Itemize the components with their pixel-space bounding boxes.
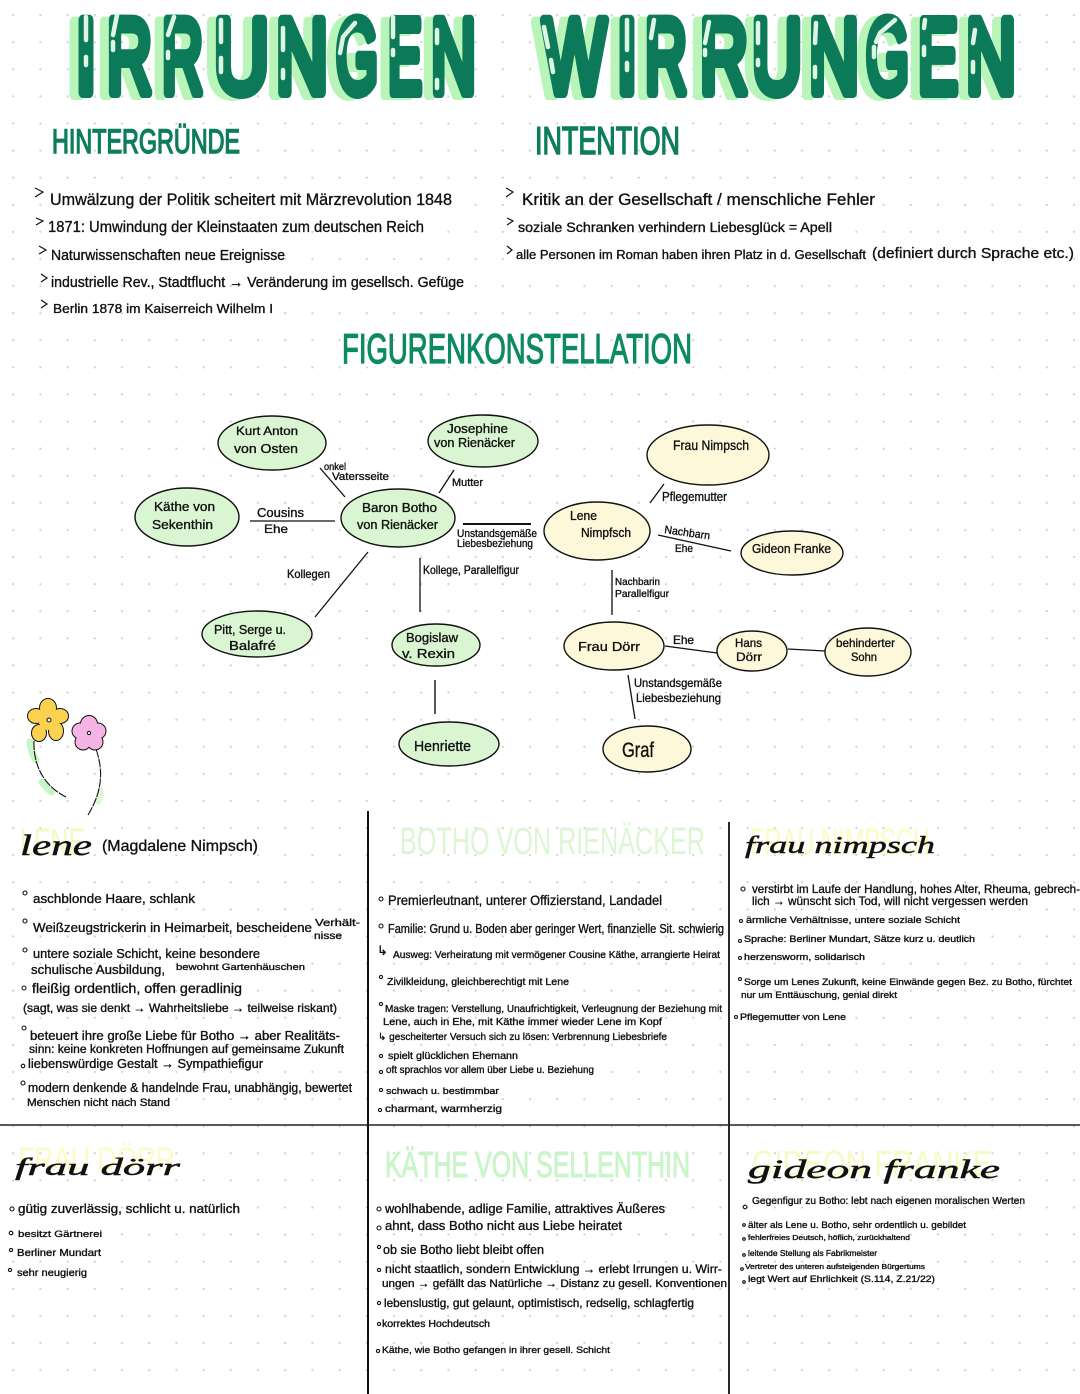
text block: Käthe traits: ob sie Botho liebt bleibt offen bbox=[383, 1243, 544, 1257]
relation labels: Ehe bbox=[673, 633, 694, 647]
title: IRRUNGEN: R bbox=[98, 0, 143, 118]
title: WIRRUNGEN: G bbox=[866, 0, 909, 116]
title: WIRRUNGEN: N bbox=[966, 0, 1016, 116]
text block: Käthe traits bbox=[376, 1201, 727, 1356]
title: WIRRUNGEN: I bbox=[608, 0, 628, 118]
node: Bogislaw v. Rexin: Bogislaw bbox=[406, 630, 459, 645]
node: Pitt, Serge, Balafré bbox=[202, 611, 312, 657]
text block: Frau Nimpsch traits: nur um Enttäuschung, genial direkt bbox=[741, 990, 897, 1001]
text block: Hintergründe: 1871: Umwindung der Kleinstaaten zum deutschen Reich bbox=[48, 219, 424, 236]
text block: Gideon traits: Gegenfigur zu Botho: lebt nach eigenen moralischen Werten bbox=[752, 1196, 1025, 1207]
node: Henriette: Henriette bbox=[414, 738, 471, 755]
relation labels: Unstandsgemäße bbox=[457, 528, 537, 540]
text block: Lene traits: untere soziale Schicht, keine besondere bbox=[33, 946, 260, 961]
text block: Botho traits: schwach u. bestimmbar bbox=[386, 1086, 499, 1097]
title: WIRRUNGEN: I bbox=[616, 0, 638, 116]
relation labels: Cousins bbox=[257, 505, 304, 520]
text block: Botho traits: Lene, auch in Ehe, mit Käthe immer wieder Lene im Kopf bbox=[383, 1017, 662, 1028]
heading: Intention: INTENTION bbox=[535, 120, 680, 163]
heading: Gideon Franke: gideon franke bbox=[748, 1155, 1000, 1184]
node: Baron Botho von Rienäcker: Baron Botho bbox=[362, 500, 437, 515]
text block: Lene traits: modern denkende & handelnde Frau, unabhängig, bewertet bbox=[28, 1080, 352, 1095]
heading: Figurenkonstellation: FIGURENKONSTELLATION bbox=[342, 325, 692, 372]
text block: Intention: (definiert durch Sprache etc.) bbox=[872, 245, 1074, 262]
node: Hans Dörr: Dörr bbox=[736, 650, 762, 664]
node: Lene Nimpsch: Nimpfsch bbox=[581, 525, 631, 540]
text block: Gideon traits: fehlerfreies Deutsch, höflich, zurückhaltend bbox=[748, 1233, 910, 1242]
text block: Hintergründe bbox=[35, 188, 464, 316]
text block: Botho traits: Ausweg: Verheiratung mit vermögener Cousine Käthe, arrangierte Heirat bbox=[393, 949, 720, 961]
node: Bogislaw v. Rexin: v. Rexin bbox=[402, 646, 455, 661]
relation labels: Liebesbeziehung bbox=[636, 691, 721, 705]
title: IRRUNGEN: U bbox=[214, 0, 269, 116]
relation labels: Pflegemutter bbox=[662, 489, 728, 504]
text block: Lene traits: Verhält- bbox=[315, 918, 360, 929]
node: Pitt, Serge, Balafré: Balafré bbox=[229, 638, 276, 653]
relation labels: Nachbarin bbox=[615, 577, 660, 588]
panel: Frau Nimpsch bbox=[734, 822, 1080, 1023]
panel: Lene bbox=[20, 822, 360, 1109]
relation labels: Parallelfigur bbox=[615, 589, 670, 600]
text block: Intention: alle Personen im Roman haben ihren Platz in d. Gesellschaft bbox=[516, 248, 867, 262]
title: IRRUNGEN: N bbox=[422, 0, 467, 118]
title: WIRRUNGEN: W bbox=[543, 0, 606, 116]
text block: Hintergründe: Umwälzung der Politik scheitert mit Märzrevolution 1848 bbox=[50, 190, 452, 209]
title: WIRRUNGEN: R bbox=[691, 0, 739, 118]
node: Bogislaw v. Rexin bbox=[392, 624, 480, 666]
text block: Käthe traits: ungen → gefällt das Natürliche → Distanz zu gesell. Konventionen bbox=[382, 1278, 727, 1290]
diagram: character constellation bbox=[135, 415, 911, 772]
text block: Käthe traits: Käthe, wie Botho gefangen in ihrer gesell. Schicht bbox=[382, 1345, 610, 1356]
panel: Frau Dörr bbox=[8, 1141, 240, 1279]
text block: Frau Dörr traits: besitzt Gärtnerei bbox=[18, 1229, 102, 1240]
panel: Gideon Franke bbox=[741, 1143, 1025, 1284]
node: Josephine von Rienäcker: Josephine bbox=[447, 421, 508, 436]
title: IRRUNGEN: E bbox=[379, 0, 413, 118]
text block: Hintergründe: industrielle Rev., Stadtflucht → Veränderung im gesellsch. Gefüge bbox=[51, 274, 464, 291]
node: Frau Dörr: Frau Dörr bbox=[578, 639, 641, 654]
relation labels: Nachbarn bbox=[664, 524, 711, 542]
text block: Botho traits: Zivilkleidung, gleichberechtigt mit Lene bbox=[387, 976, 569, 988]
node: Baron Botho von Rienäcker bbox=[341, 489, 455, 547]
text block: Lene traits: aschblonde Haare, schlank bbox=[33, 891, 196, 906]
text block: Botho traits: spielt glücklichen Ehemann bbox=[388, 1051, 518, 1062]
text block: Botho traits bbox=[377, 892, 724, 1115]
title: IRRUNGEN: U bbox=[205, 0, 260, 118]
title: IRRUNGEN: G bbox=[336, 0, 378, 116]
node: Gideon Franke bbox=[741, 531, 843, 575]
title: WIRRUNGEN: E bbox=[909, 0, 949, 118]
title: IRRUNGEN: N bbox=[276, 0, 328, 116]
text block: Botho traits: ↳ gescheiterter Versuch sich zu lösen: Verbrennung Liebesbriefe bbox=[378, 1032, 667, 1043]
node: Kurt Anton von Osten bbox=[218, 416, 326, 470]
node: behinderter Sohn: Sohn bbox=[851, 650, 877, 664]
relation labels: Vatersseite bbox=[332, 471, 389, 483]
text block: Käthe traits: ahnt, dass Botho nicht aus Liebe heiratet bbox=[385, 1218, 622, 1233]
text block: Intention bbox=[506, 188, 1074, 262]
heading: Lene: LENE bbox=[20, 822, 85, 864]
text block: Frau Dörr traits: sehr neugierig bbox=[17, 1268, 87, 1279]
text block: Gideon traits bbox=[741, 1196, 1025, 1284]
text block: Käthe traits: nicht staatlich, sondern Entwicklung → erlebt Irrungen u. Wirr- bbox=[385, 1262, 722, 1276]
text block: Botho traits: ↳ bbox=[377, 943, 388, 958]
node: Baron Botho von Rienäcker: von Rienäcker bbox=[357, 518, 438, 532]
relation labels: Ehe bbox=[264, 522, 288, 536]
title: WIRRUNGEN: R bbox=[636, 0, 678, 118]
text block: Gideon traits: leitende Stellung als Fabrikmeister bbox=[748, 1249, 877, 1258]
text block: Frau Nimpsch traits: Pflegemutter von Lene bbox=[740, 1012, 846, 1023]
node: Pitt, Serge, Balafré: Pitt, Serge u. bbox=[214, 622, 286, 637]
text block: Käthe traits: korrektes Hochdeutsch bbox=[382, 1319, 490, 1330]
node: Frau Nimpsch bbox=[647, 425, 769, 485]
text block: Botho traits: oft sprachlos vor allem über Liebe u. Beziehung bbox=[386, 1065, 594, 1076]
text block: Lene traits: bewohnt Gartenhäuschen bbox=[176, 962, 305, 973]
text block: Frau Nimpsch traits bbox=[734, 882, 1080, 1023]
node: Kurt Anton von Osten: von Osten bbox=[234, 441, 298, 456]
relation labels: Unstandsgemäße bbox=[634, 676, 722, 690]
node: Kurt Anton von Osten: Kurt Anton bbox=[236, 424, 298, 438]
text block: Lene traits: nisse bbox=[314, 931, 343, 942]
title: IRRUNGEN: N bbox=[267, 0, 319, 118]
node: Henriette bbox=[399, 722, 499, 766]
panel: Käthe von Sellenthin bbox=[376, 1144, 727, 1356]
text block: Frau Nimpsch traits: ärmliche Verhältnisse, untere soziale Schicht bbox=[746, 915, 960, 926]
relation labels: Ehe bbox=[675, 543, 693, 555]
title: WIRRUNGEN: G bbox=[857, 0, 900, 118]
text block: Hintergründe: Berlin 1878 im Kaiserreich Wilhelm I bbox=[53, 301, 273, 316]
node: Käthe von Sellenthin bbox=[135, 488, 239, 546]
relation labels bbox=[257, 462, 728, 705]
node: Graf: Graf bbox=[622, 739, 654, 762]
heading: Frau Nimpsch: frau nimpsch bbox=[745, 833, 935, 859]
text block: Frau Dörr traits bbox=[8, 1201, 240, 1279]
text block: Lene traits: fleißig ordentlich, offen geradlinig bbox=[32, 980, 242, 996]
relation labels: Kollege, Parallelfigur bbox=[423, 563, 519, 577]
text block: Lene traits bbox=[21, 891, 360, 1109]
node: Josephine von Rienäcker bbox=[428, 415, 538, 467]
title: WIRRUNGEN: E bbox=[918, 0, 958, 116]
text block: Intention: Kritik an der Gesellschaft / menschliche Fehler bbox=[522, 190, 875, 209]
node: behinderter Sohn: behinderter bbox=[836, 636, 895, 650]
heading: Lene: lene bbox=[20, 829, 92, 862]
title: WIRRUNGEN: W bbox=[534, 0, 597, 118]
text block: Frau Nimpsch traits: Sorge um Lenes Zukunft, keine Einwände gegen Bez. zu Botho, fürchtet bbox=[744, 977, 1072, 988]
heading: Käthe von Sellenthin: KÄTHE VON SELLENTHIN bbox=[385, 1144, 690, 1185]
panel: Botho von Rienäcker bbox=[377, 821, 724, 1115]
heading: Hintergründe: HINTERGRÜNDE bbox=[52, 123, 240, 161]
node: Käthe von Sellenthin: Käthe von bbox=[154, 499, 215, 514]
node: Frau Dörr bbox=[564, 622, 664, 670]
title: WIRRUNGEN: U bbox=[743, 0, 793, 118]
title: WIRRUNGEN: U bbox=[752, 0, 802, 116]
title: WIRRUNGEN: R bbox=[700, 0, 748, 116]
node: Lene Nimpsch: Lene bbox=[570, 508, 597, 523]
node: Josephine von Rienäcker: von Rienäcker bbox=[434, 436, 515, 450]
title: IRRUNGEN: R bbox=[162, 0, 203, 116]
title: IRRUNGEN: G bbox=[327, 0, 369, 118]
node: Käthe von Sellenthin: Sekenthin bbox=[152, 517, 213, 532]
text block: Botho traits: charmant, warmherzig bbox=[385, 1104, 502, 1115]
title: IRRUNGEN: R bbox=[107, 0, 152, 116]
heading: Frau Dörr: FRAU DÖRR bbox=[18, 1141, 175, 1177]
title: WIRRUNGEN: N bbox=[800, 0, 850, 118]
heading: Frau Nimpsch: FRAU NIMPSCH bbox=[750, 822, 930, 864]
heading: Lene bbox=[20, 822, 258, 864]
text block: Käthe traits: lebenslustig, gut gelaunt, optimistisch, redselig, schlagfertig bbox=[384, 1296, 694, 1310]
text block: Käthe traits: wohlhabende, adlige Familie, attraktives Äußeres bbox=[384, 1201, 665, 1216]
node: Lene Nimpsch bbox=[544, 502, 650, 560]
text block: Lene traits: schulische Ausbildung, bbox=[31, 962, 165, 977]
text block: Hintergründe: Naturwissenschaften neue Ereignisse bbox=[51, 247, 285, 264]
heading: Botho von Rienäcker: BOTHO VON RIENÄCKER bbox=[400, 821, 705, 863]
heading: Frau Dörr: frau dörr bbox=[15, 1155, 181, 1181]
node: Frau Nimpsch: Frau Nimpsch bbox=[673, 437, 749, 453]
title: IRRUNGEN: E bbox=[388, 0, 422, 116]
text block: Lene traits: (sagt, was sie denkt → Wahrheitsliebe → teilweise riskant) bbox=[23, 1001, 337, 1015]
title: WIRRUNGEN: N bbox=[957, 0, 1007, 118]
text block: Lene traits: Weißzeugstrickerin in Heimarbeit, bescheidene bbox=[33, 920, 312, 935]
icon: flowers bbox=[28, 699, 106, 815]
title bbox=[66, 0, 1016, 118]
title: IRRUNGEN bbox=[66, 0, 476, 118]
text block: Gideon traits: Vertreter des unteren aufsteigenden Bürgertums bbox=[745, 1264, 926, 1271]
text block: Lene traits: beteuert ihre große Liebe für Botho → aber Realitäts- bbox=[30, 1028, 340, 1043]
connector lines bbox=[250, 468, 825, 719]
text block: Frau Nimpsch traits: herzensworm, solidarisch bbox=[744, 952, 865, 962]
text block: Lene traits: sinn: keine konkreten Hoffnungen auf gemeinsame Zukunft bbox=[29, 1044, 345, 1056]
text block: Lene traits: Menschen nicht nach Stand bbox=[27, 1097, 170, 1109]
text block: Frau Nimpsch traits: Sprache: Berliner Mundart, Sätze kurz u. deutlich bbox=[744, 934, 975, 945]
text block: Frau Dörr traits: Berliner Mundart bbox=[17, 1248, 101, 1259]
text block: Gideon traits: legt Wert auf Ehrlichkeit (S.114, Z.21/22) bbox=[748, 1274, 935, 1284]
node: Hans Dörr bbox=[717, 631, 787, 671]
text block: Botho traits: Familie: Grund u. Boden aber geringer Wert, finanzielle Sit. schwierig bbox=[388, 922, 724, 936]
node: Gideon Franke: Gideon Franke bbox=[752, 542, 831, 556]
node: behinderter Sohn bbox=[825, 628, 911, 676]
text block: Lene traits: liebenswürdige Gestalt → Sympathiefigur bbox=[28, 1057, 263, 1071]
text block: Gideon traits: älter als Lene u. Botho, sehr ordentlich u. gebildet bbox=[748, 1220, 966, 1231]
relation labels: Mutter bbox=[452, 477, 483, 489]
text block: Botho traits: Maske tragen: Verstellung, Unaufrichtigkeit, Verleugnung der Beziehung mit bbox=[385, 1003, 722, 1015]
title: IRRUNGEN: R bbox=[153, 0, 194, 118]
heading: Frau Nimpsch bbox=[745, 822, 935, 864]
title: WIRRUNGEN: R bbox=[645, 0, 687, 116]
relation labels: onkel bbox=[324, 462, 346, 473]
relation labels: Kollegen bbox=[287, 567, 330, 581]
title: WIRRUNGEN bbox=[534, 0, 1016, 118]
text block: Frau Dörr traits: gütig zuverlässig, schlicht u. natürlich bbox=[18, 1201, 240, 1216]
heading: Lene: (Magdalene Nimpsch) bbox=[102, 838, 258, 855]
node: Graf bbox=[603, 726, 691, 772]
title: WIRRUNGEN: N bbox=[809, 0, 859, 116]
title: IRRUNGEN: I bbox=[66, 0, 88, 118]
text block: Frau Nimpsch traits: lich → wünscht sich Tod, will nicht vergessen werden bbox=[752, 894, 1028, 908]
grid dividers bbox=[0, 811, 1080, 1394]
title: IRRUNGEN: N bbox=[431, 0, 476, 116]
text block: Botho traits: Premierleutnant, unterer Offizierstand, Landadel bbox=[388, 892, 662, 908]
heading: Gideon Franke: GIDEON FRANKE bbox=[752, 1143, 992, 1184]
title: IRRUNGEN: I bbox=[76, 0, 96, 116]
relation labels: Liebesbeziehung bbox=[457, 538, 533, 550]
node: Hans Dörr: Hans bbox=[735, 636, 762, 650]
text block: Intention: soziale Schranken verhindern Liebesglück = Apell bbox=[518, 219, 832, 235]
